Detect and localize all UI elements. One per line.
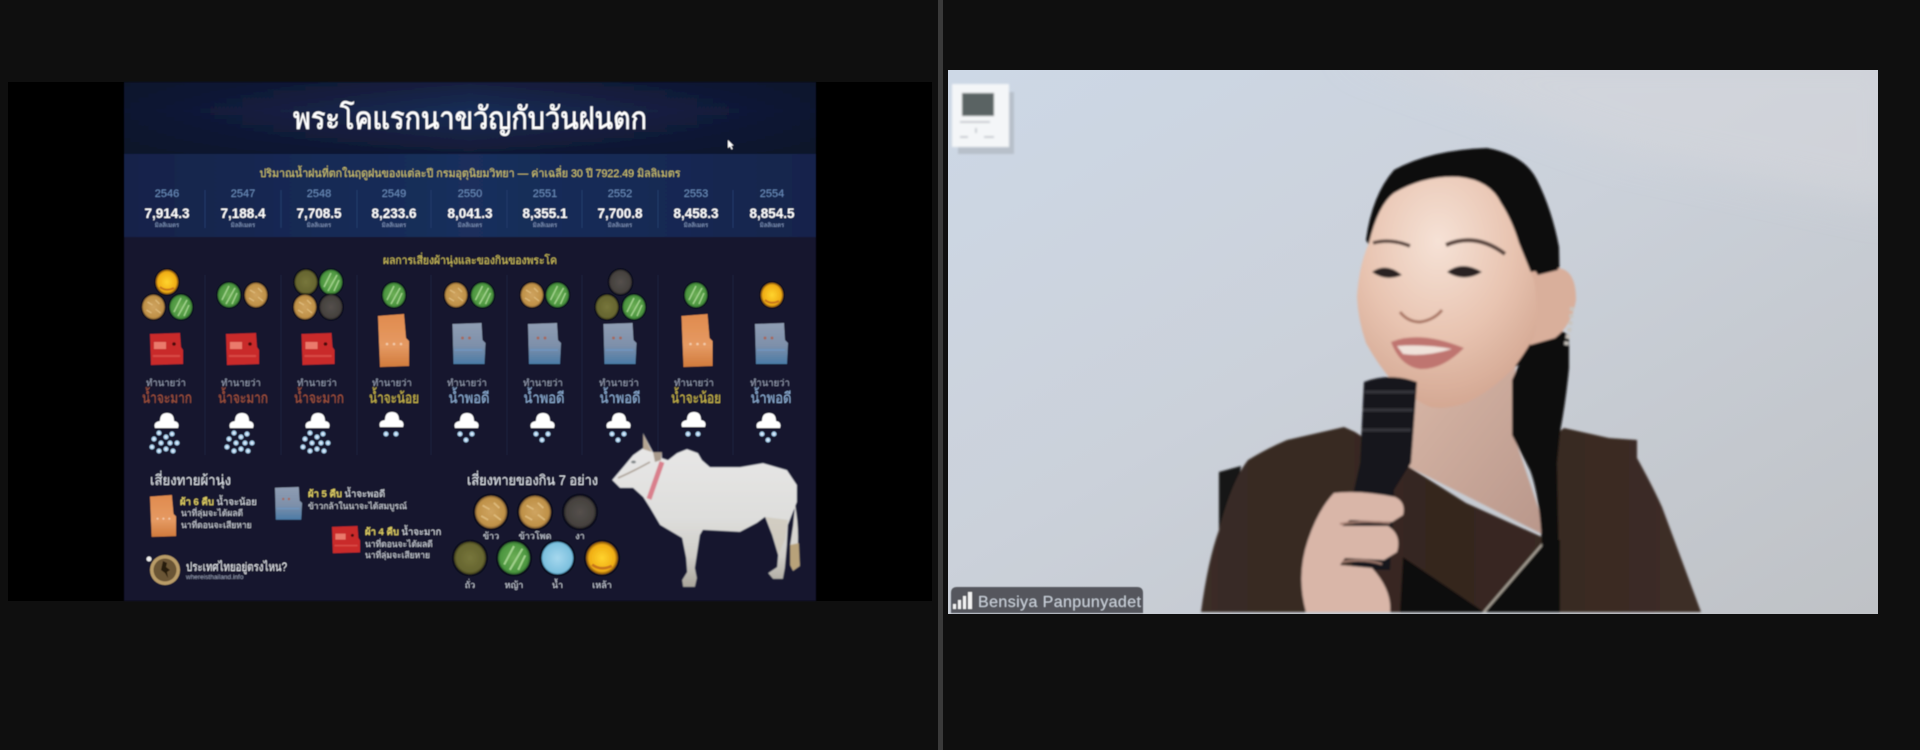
cloth 5 spans [275,487,407,520]
rainfall subtitle: ปริมาณน้ำฝนที่ตกในฤดูฝนของแต่ละปี กรมอุตุนิยมวิทยา — ค่าเฉลี่ย 30 ปี 7922.49 มิลลิเมตร [260,165,681,180]
predictions by year: น้ำจะน้อย [671,387,721,407]
food: liquor: เหล้า [592,580,612,590]
yearly rainfall figures: 7,700.8 [597,206,643,221]
food: beans: ถั่ว [465,578,475,590]
hair back [1366,148,1560,370]
yearly rainfall figures: มิลลิเมตร [533,222,558,229]
yearly rainfall figures: มิลลิเมตร [307,222,332,229]
predictions by year: น้ำพอดี [750,387,792,407]
yearly rainfall figures: 2553 [684,188,708,200]
icon: moderate rain, 2554 [757,413,780,442]
left eye [1372,268,1402,278]
yearly rainfall figures: 2551 [533,188,557,200]
predictions by year [142,378,792,407]
panel: infographic slide [124,82,816,601]
right eyebrow [1446,240,1505,254]
icon: heavy rain, 2547 [224,413,254,454]
yearly rainfall figures [144,188,795,229]
food: water [539,540,576,590]
mouth [1391,337,1464,369]
heading: cloth: เสี่ยงทายผ้านุ่ง [150,471,231,489]
predictions by year: น้ำจะมาก [142,387,192,407]
ear [1530,268,1576,345]
predictions by year: ทำนายว่า [297,378,337,389]
predictions by year: น้ำพอดี [524,387,564,407]
cloth 6 spans: ผ้า 6 คืบ น้ำจะน้อย [180,495,257,508]
icon: moderate rain, 2552 [607,413,630,442]
zip trim [1484,540,1546,612]
nose shadow [1400,310,1442,322]
logo: where is Thailand: whereisthailand.info [185,574,244,581]
yearly rainfall figures: 2548 [307,188,331,200]
yearly rainfall figures: 2549 [382,188,406,200]
rainfall band [124,154,816,237]
mouse cursor [728,140,734,150]
left eyebrow [1373,241,1410,246]
food: sesame [562,494,598,541]
panel background [124,82,816,601]
icon: moderate rain, 2550 [455,413,478,442]
food: water: น้ำ [552,578,563,590]
blouse [1201,427,1701,612]
microphone grille [1362,392,1415,430]
cloth 4 spans: ผ้า 4 คืบ น้ำจะมาก [365,525,442,538]
yearly rainfall figures: 7,708.5 [296,206,342,221]
ponytail [1510,330,1571,548]
food: beans [452,540,488,590]
yearly rainfall figures: 8,355.1 [522,206,568,221]
predictions by year: น้ำจะมาก [294,387,344,407]
wall [948,70,1878,614]
yearly rainfall figures: 7,914.3 [144,206,190,221]
cloth 4 spans: นาที่ดอนจะได้ผลดี [365,538,433,549]
yearly rainfall figures: 2550 [458,188,482,200]
food: corn [517,494,553,541]
icon: heavy rain, 2546 [150,413,180,454]
cloth icons by year [150,314,788,367]
section heading: results: ผลการเสี่ยงผ้านุ่งและของกินของพระโค [383,252,557,267]
yearly rainfall figures: มิลลิเมตร [382,222,407,229]
wall thermostat [952,84,1014,154]
blouse lower opening [1400,557,1484,612]
yearly rainfall figures: มิลลิเมตร [231,222,256,229]
lighter wall patch [1340,50,1900,210]
signal bars icon [953,592,972,609]
chair [1219,466,1241,535]
food: rice [473,494,509,541]
yearly rainfall figures: 2546 [155,188,179,200]
yearly rainfall figures: 8,854.5 [749,206,795,221]
face [1357,177,1537,408]
cloth 6 spans: นาที่ลุ่มจะได้ผลดี [181,507,243,519]
cloth 5 spans: ผ้า 5 คืบ น้ำจะพอดี [308,487,385,500]
predictions by year: ทำนายว่า [523,378,563,389]
predictions by year: น้ำพอดี [600,387,640,407]
cloth 5 spans: ข้าวกล้าในนาจะได้สมบูรณ์ [308,501,407,512]
icon: heavy rain, 2548 [300,413,330,454]
earring [1566,307,1572,345]
yearly rainfall figures: 8,458.3 [673,206,719,221]
yearly rainfall figures: มิลลิเมตร [608,222,633,229]
cloth 4 spans: นาที่ลุ่มจะเสียหาย [365,549,430,561]
predictions by year: ทำนายว่า [599,378,639,389]
heading: food: เสี่ยงทายของกิน 7 อย่าง [467,471,598,488]
yearly rainfall figures: 2547 [231,188,255,200]
teeth [1397,345,1452,355]
yearly rainfall figures: 8,041.3 [447,206,493,221]
food: corn: ข้าวโพด [519,531,552,541]
cloth 6 spans: นาที่ดอนจะเสียหาย [181,519,252,530]
logo: where is Thailand [146,555,287,585]
illustration: white ox [612,433,800,587]
food coins by year [140,268,785,321]
hand [1301,492,1404,612]
title band [124,82,816,154]
food: sesame: งา [575,531,585,541]
yearly rainfall figures: 2554 [760,188,784,200]
icon: light rain, 2549 [380,412,404,436]
predictions by year: ทำนายว่า [221,378,261,389]
food: grass [496,540,532,590]
logo: where is Thailand: ประเทศไทยอยู่ตรงไหน? [186,560,287,575]
yearly rainfall figures: มิลลิเมตร [760,222,785,229]
food: liquor [584,540,620,590]
icon: moderate rain, 2551 [531,413,554,442]
predictions by year: ทำนายว่า [674,378,714,389]
column dividers [205,275,733,455]
panel: presenter video [948,50,1900,614]
hair strand over temple [1534,266,1560,276]
panel: cloth legend [146,471,442,585]
divider between shared screen and video [938,0,943,750]
right eye [1447,266,1482,278]
participant name tag [951,587,1143,613]
yearly rainfall figures: มิลลิเมตร [155,222,180,229]
yearly rainfall figures: 8,233.6 [371,206,417,221]
microphone [1352,377,1417,570]
icon: light rain, 2553 [682,412,706,436]
predictions by year: ทำนายว่า [750,378,790,389]
title: พระโคแรกนาขวัญกับวันฝนตก [293,101,647,136]
predictions by year: น้ำจะมาก [218,387,268,407]
neck and chest [1409,360,1548,537]
predictions by year: ทำนายว่า [447,378,487,389]
predictions by year: น้ำพอดี [448,387,490,407]
yearly rainfall figures: มิลลิเมตร [458,222,483,229]
shared screen letterbox [8,82,932,601]
band dividers [205,190,733,228]
yearly rainfall figures: มิลลิเมตร [684,222,709,229]
yearly rainfall figures: 7,188.4 [220,206,266,221]
food: rice: ข้าว [483,531,499,541]
predictions by year: ทำนายว่า [146,378,186,389]
predictions by year: น้ำจะน้อย [369,387,419,407]
food: grass: หญ้า [505,580,523,590]
cloth 6 spans [150,495,257,537]
presenter [1201,148,1701,612]
cloth 4 spans [332,525,442,561]
finger creases [1340,522,1390,564]
participant name: Bensiya Panpunyadet [978,594,1142,611]
panel: food legend [452,471,620,590]
predictions by year: ทำนายว่า [372,378,412,389]
yearly rainfall figures: 2552 [608,188,632,200]
